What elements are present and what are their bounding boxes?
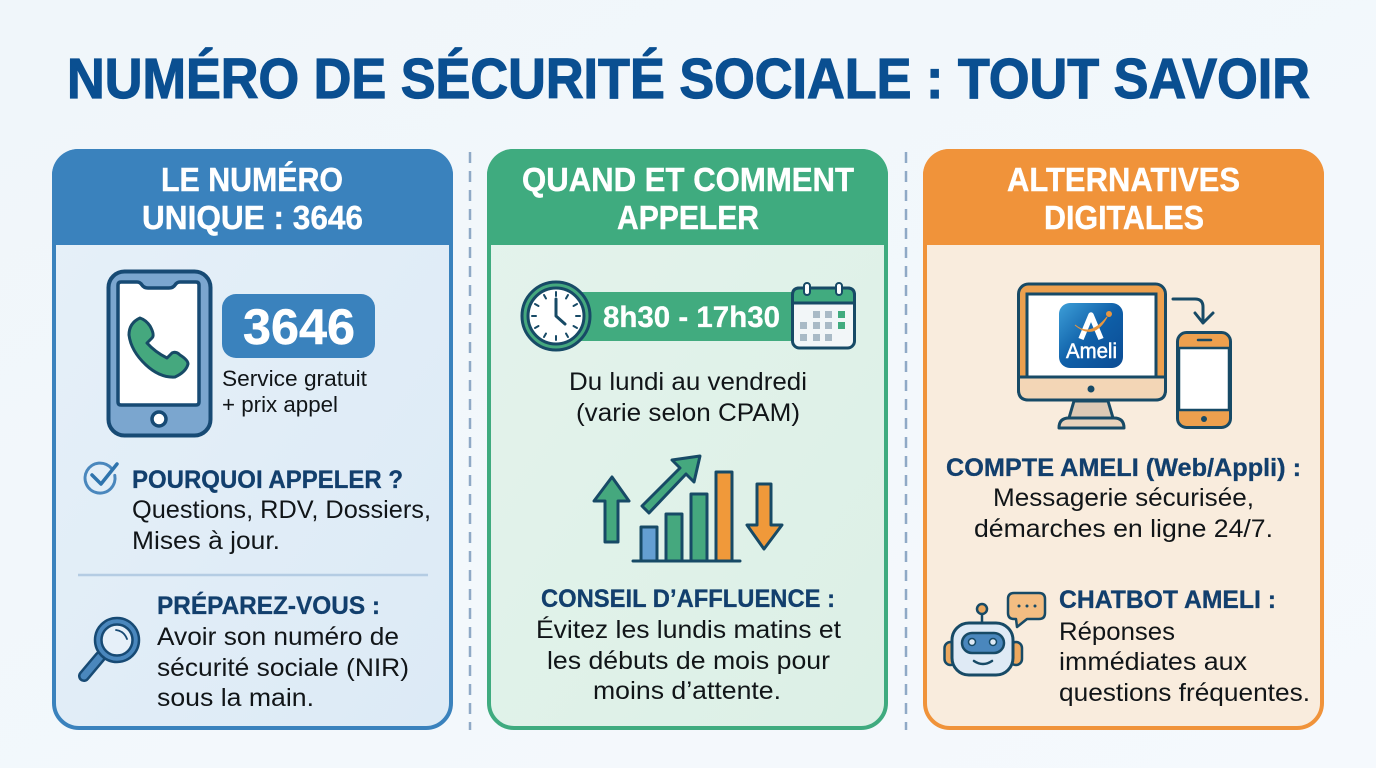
- text block: préparez-vous: [157, 591, 409, 712]
- text block: compte ameli: COMPTE AMELI (Web/Appli) :: [946, 454, 1301, 482]
- chart icon: affluence bars and arrows: [594, 456, 782, 561]
- text: service gratuit: + prix appel: [222, 392, 338, 417]
- logo: Ameli: Ameli: [1066, 340, 1117, 363]
- text block: chatbot ameli: Réponses: [1059, 618, 1175, 646]
- text block: conseil d'affluence: [536, 585, 841, 705]
- text block: chatbot ameli: CHATBOT AMELI :: [1059, 586, 1276, 614]
- text: service gratuit: Service gratuit: [222, 366, 367, 391]
- text block: pourquoi appeler: POURQUOI APPELER ?: [132, 466, 403, 494]
- text block: pourquoi appeler: [132, 466, 431, 555]
- text block: conseil d'affluence: les débuts de mois pour: [547, 647, 830, 675]
- text: jours d'ouverture: (varie selon CPAM): [576, 399, 800, 427]
- arrow: desktop to phone: [1173, 299, 1213, 323]
- text block: compte ameli: [946, 454, 1301, 543]
- badge: 3646: [222, 294, 375, 358]
- icon: smartphone with handset: [108, 272, 210, 436]
- text block: conseil d'affluence: Évitez les lundis matins et: [536, 615, 841, 644]
- text block: pourquoi appeler: Questions, RDV, Dossiers,: [132, 496, 431, 524]
- panel header: quand et comment appeler: APPELER: [617, 199, 759, 236]
- icon: desktop monitor with Ameli logo: [1018, 284, 1166, 428]
- panel header: alternatives digitales: DIGITALES: [1044, 199, 1204, 236]
- panel header: le numéro unique: LE NUMÉRO: [161, 161, 343, 198]
- text block: chatbot ameli: immédiates aux: [1059, 648, 1248, 676]
- panel header: le numéro unique: [52, 149, 453, 245]
- text block: conseil d'affluence: moins d’attente.: [593, 677, 781, 705]
- icon: mobile phone: [1178, 332, 1230, 428]
- icon: check circle: [85, 463, 117, 493]
- text block: préparez-vous: Avoir son numéro de: [157, 623, 399, 651]
- text block: pourquoi appeler: Mises à jour.: [132, 527, 280, 555]
- panel header: quand et comment appeler: QUAND ET COMMENT: [522, 161, 854, 198]
- panel header: alternatives digitales: ALTERNATIVES: [1007, 161, 1240, 198]
- text block: chatbot ameli: questions fréquentes.: [1059, 679, 1310, 707]
- logo: Ameli: [1059, 303, 1123, 368]
- panel: le numéro unique: [52, 149, 453, 728]
- panel header: quand et comment appeler: [487, 149, 888, 245]
- text block: chatbot ameli: [1059, 586, 1310, 707]
- text block: compte ameli: Messagerie sécurisée,: [993, 484, 1254, 512]
- badge: 3646: 3646: [243, 299, 355, 355]
- icon: chatbot with speech bubble: [944, 593, 1045, 675]
- text: jours d'ouverture: Du lundi au vendredi: [569, 368, 807, 396]
- hours band: 8h30 - 17h30: [603, 301, 780, 334]
- icon: calendar: [792, 283, 854, 348]
- text block: compte ameli: démarches en ligne 24/7.: [974, 515, 1273, 543]
- text: jours d'ouverture: [569, 368, 807, 427]
- panel: alternatives digitales: [923, 149, 1324, 728]
- panel: quand et comment appeler: [487, 149, 888, 728]
- icon: clock: [522, 282, 590, 350]
- text block: préparez-vous: PRÉPAREZ-VOUS :: [157, 591, 380, 620]
- text: service gratuit: [222, 366, 367, 417]
- hours band: [570, 292, 796, 341]
- text block: préparez-vous: sous la main.: [157, 684, 314, 712]
- text block: préparez-vous: sécurité sociale (NIR): [157, 654, 409, 682]
- text block: conseil d'affluence: CONSEIL D’AFFLUENCE :: [541, 585, 835, 613]
- panel header: le numéro unique: UNIQUE : 3646: [142, 199, 363, 236]
- panel header: alternatives digitales: [923, 149, 1324, 245]
- icon: magnifying glass: [84, 618, 139, 676]
